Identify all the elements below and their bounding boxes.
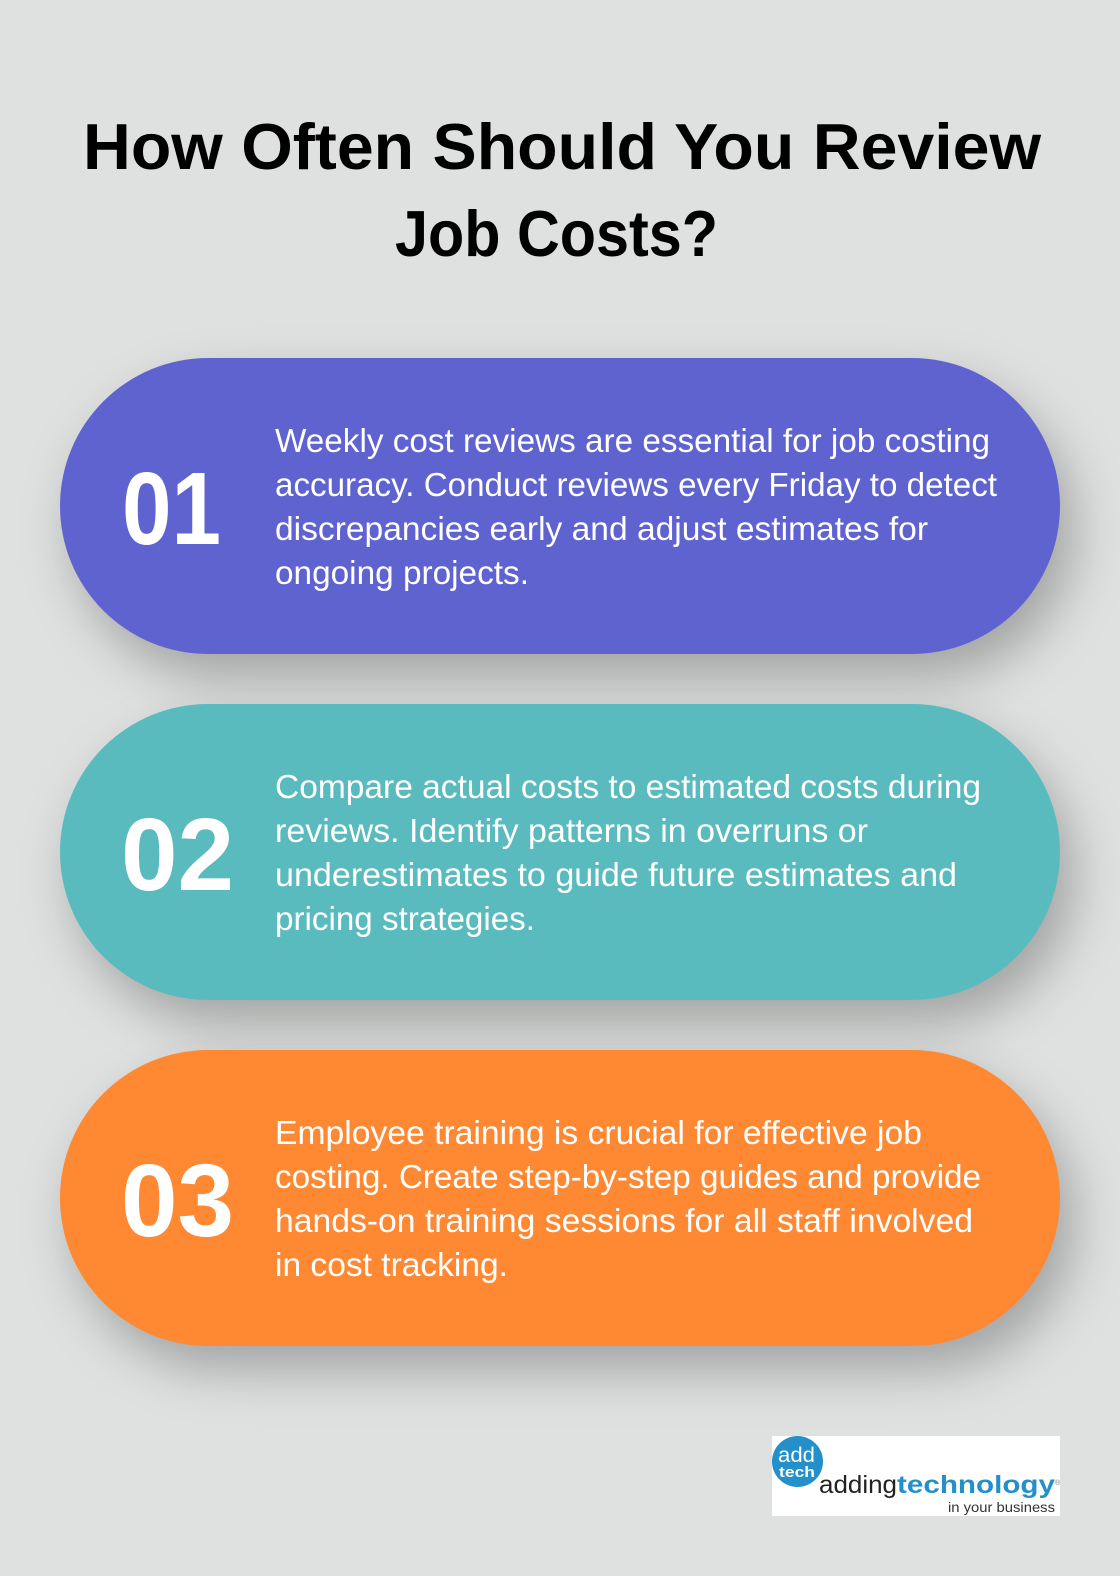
wordmark: in your business (948, 1499, 1055, 1515)
pill background: step 01 (60, 358, 1060, 654)
icon: add tech circle: add (778, 1444, 815, 1467)
text: step 03 description: costing. Create step-by-step guides and provide (275, 1159, 981, 1196)
logo: adding technology (772, 1436, 1061, 1516)
icon: add tech circle: tech (779, 1464, 815, 1481)
title: Job Costs? (395, 197, 718, 270)
pill background: step 03 (60, 1050, 1060, 1346)
wordmark: technology (897, 1471, 1055, 1499)
number: 01: 01 (122, 451, 221, 566)
number: 03: 03 (121, 1143, 234, 1258)
wordmark (819, 1471, 1061, 1515)
text: step 03 description: Employee training is crucial for effective job (275, 1115, 922, 1152)
text: step 02 description: pricing strategies. (275, 901, 535, 938)
title (83, 110, 1041, 270)
panel: step 01 (60, 358, 1060, 654)
text: step 01 description: Weekly cost reviews are essential for job costing (275, 423, 990, 460)
text: step 03 description: hands-on training sessions for all staff involved (275, 1203, 973, 1240)
wordmark: ® (1055, 1479, 1061, 1487)
panel: step 03 (60, 1050, 1060, 1346)
number: 02: 02 (121, 797, 234, 912)
text: step 03 description: in cost tracking. (275, 1247, 508, 1284)
text: step 01 description: ongoing projects. (275, 555, 529, 592)
text: step 01 description: discrepancies early and adjust estimates for (275, 511, 928, 548)
text: step 02 description: Compare actual costs to estimated costs during (275, 769, 981, 806)
panel: step 02 (60, 704, 1060, 1000)
title: How Often Should You Review (83, 110, 1041, 183)
pill background: step 02 (60, 704, 1060, 1000)
wordmark: adding (819, 1471, 897, 1499)
icon: add tech circle (772, 1436, 823, 1487)
text: step 02 description: underestimates to guide future estimates and (275, 857, 957, 894)
text: step 01 description (275, 423, 998, 592)
text: step 01 description: accuracy. Conduct reviews every Friday to detect (275, 467, 998, 504)
text: step 02 description: reviews. Identify patterns in overruns or (275, 813, 868, 850)
text: step 02 description (275, 769, 981, 938)
text: step 03 description (275, 1115, 981, 1284)
